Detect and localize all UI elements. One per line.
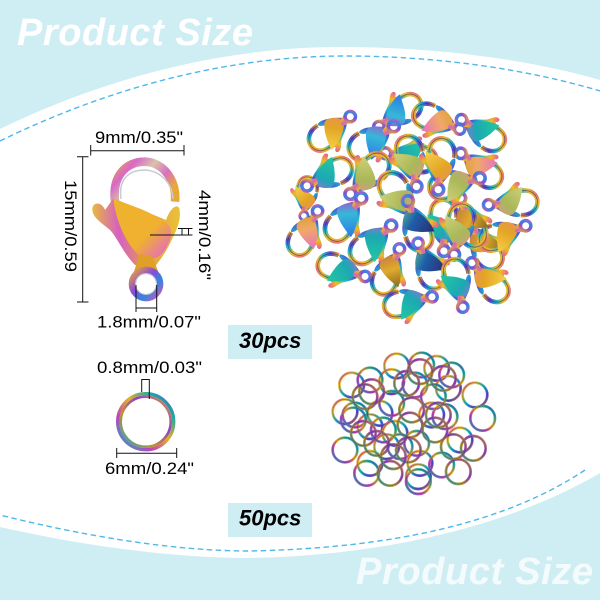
jump ring diagram bbox=[97, 358, 202, 478]
pile of 50 jump rings bbox=[333, 353, 495, 494]
label: 50pcs bbox=[228, 503, 312, 537]
dimension: 4mm bbox=[150, 190, 214, 280]
icon: large jump ring bbox=[118, 394, 174, 450]
dimension: 15mm length: 15mm/0.59 bbox=[61, 180, 80, 272]
dimension: 0.8mm: 0.8mm/0.03" bbox=[97, 358, 202, 377]
title: bottom: Product Size bbox=[356, 551, 593, 593]
icon: large lobster clasp bbox=[92, 162, 180, 298]
label: 30pcs bbox=[228, 325, 312, 359]
large clasp diagram bbox=[61, 128, 214, 332]
dimension: 9mm width bbox=[91, 128, 184, 156]
label: 30pcs: 30pcs bbox=[239, 328, 301, 353]
dimension: 9mm width: 9mm/0.35" bbox=[95, 128, 183, 147]
dimension: 4mm: 4mm/0.16" bbox=[195, 190, 214, 280]
dimension: 1.8mm: 1.8mm/0.07" bbox=[97, 312, 201, 332]
pile of 30 clasps bbox=[281, 82, 538, 328]
dimension: 1.8mm bbox=[97, 285, 201, 332]
label: 50pcs: 50pcs bbox=[239, 506, 301, 530]
dimension: 6mm: 6mm/0.24" bbox=[105, 459, 194, 478]
dimension: 15mm length bbox=[61, 157, 88, 302]
title: top: Product Size bbox=[17, 12, 253, 54]
